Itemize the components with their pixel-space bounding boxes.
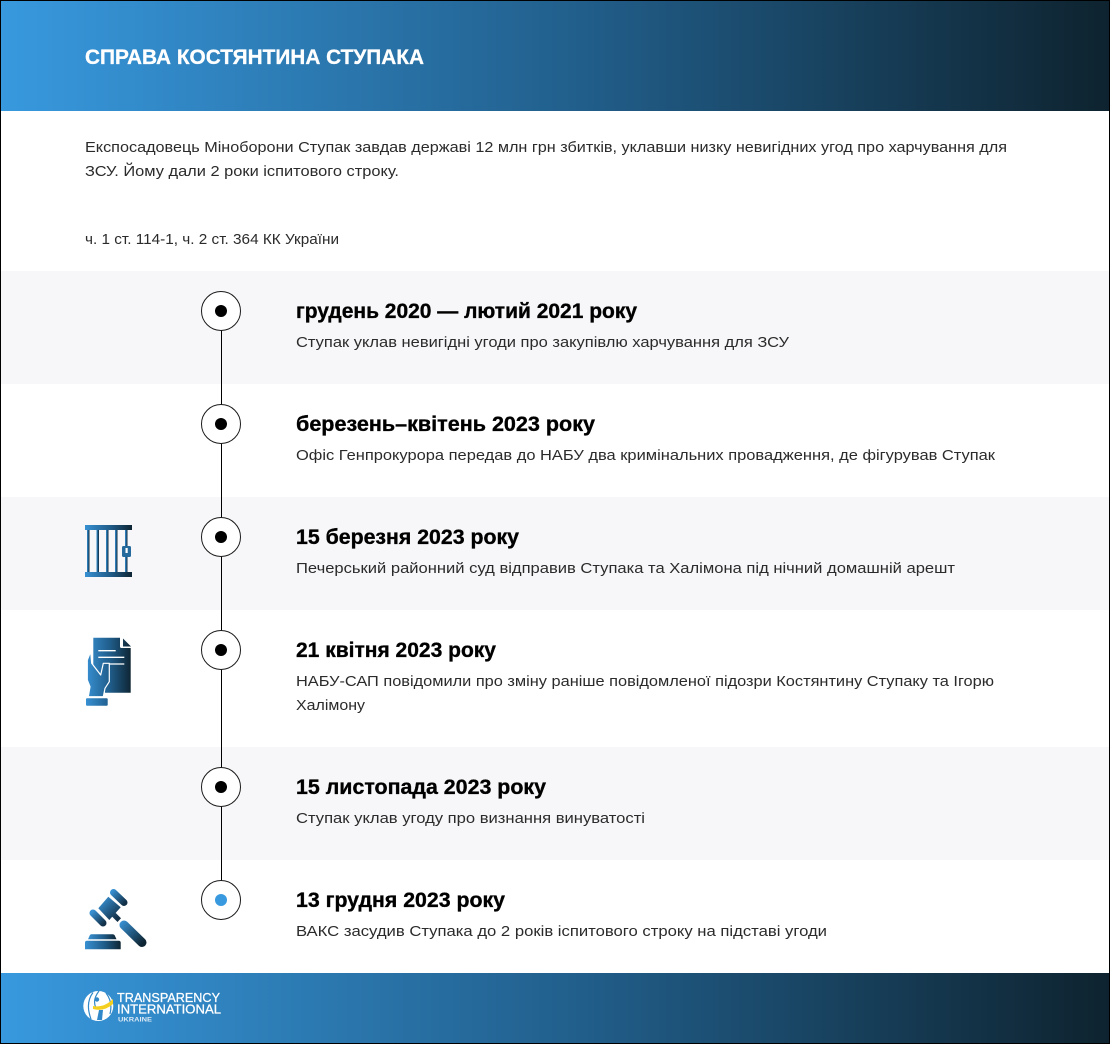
logo: Transparency International Ukraine: TRANSPARENCY [117,991,221,1005]
footer banner [1,973,1109,1043]
timeline event 5 [202,768,645,827]
timeline event 4 [202,630,994,714]
timeline event 4: НАБУ-САП повідомили про зміну раніше повідомленої підозри Костянтину Ступаку та Ігорю [296,673,994,690]
icon: gavel [85,892,142,949]
timeline event 2: Офіс Генпрокурора передав до НАБУ два кримінальних провадження, де фігурував Ступак [296,447,995,464]
timeline event 4: Халімону [296,697,366,714]
logo: Transparency International Ukraine: INTERNATIONAL [117,1002,221,1016]
timeline line [220,311,222,900]
icon: prison bars [85,525,132,577]
intro text [85,139,1007,180]
timeline event 3: 15 березня 2023 року [296,526,519,549]
timeline event 5: 15 листопада 2023 року [296,776,546,799]
timeline event 2 [202,404,995,464]
timeline event 1 [202,292,790,351]
timeline event 4: 21 квітня 2023 року [296,639,496,662]
timeline event 3: Печерський районний суд відправив Ступака та Халімона під нічний домашній арешт [296,560,955,577]
timeline event 6: 13 грудня 2023 року [296,889,505,912]
intro text: Експосадовець Міноборони Ступак завдав державі 12 млн грн збитків, уклавши низку невигідних угод про харчування для [85,139,1007,156]
header banner [1,1,1109,111]
title: СПРАВА КОСТЯНТИНА СТУПАКА [85,46,424,69]
timeline event 2: березень–квітень 2023 року [296,413,595,436]
timeline event 1: грудень 2020 — лютий 2021 року [296,300,637,323]
timeline event 1: Ступак уклав невигідні угоди про закупівлю харчування для ЗСУ [296,334,790,351]
logo: Transparency International Ukraine: UKRAINE [118,1017,153,1024]
icon: hand holding document [86,638,131,706]
legal articles: ч. 1 ст. 114-1, ч. 2 ст. 364 КК України [85,231,339,248]
timeline event 3 [202,518,955,577]
timeline event 5: Ступак уклав угоду про визнання винуватості [296,810,645,827]
intro text: ЗСУ. Йому дали 2 роки іспитового строку. [85,162,399,180]
timeline event 6: ВАКС засудив Ступака до 2 років іспитового строку на підставі угоди [296,923,827,940]
timeline event 6 [202,880,827,940]
logo: Transparency International Ukraine [83,991,221,1024]
